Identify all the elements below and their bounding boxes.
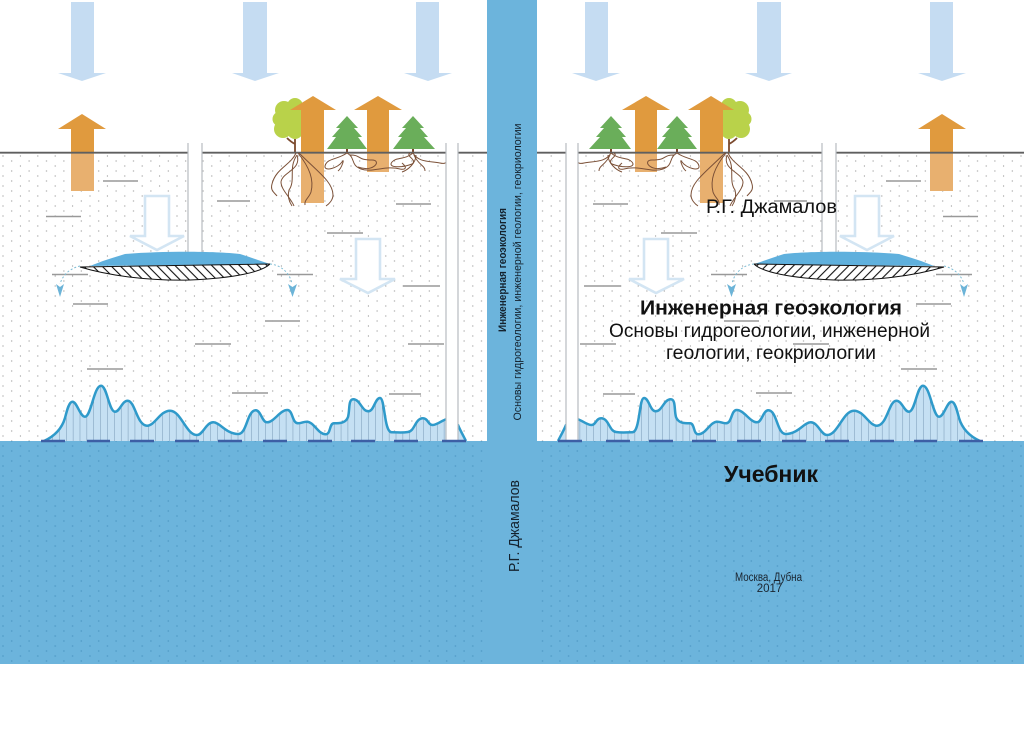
soil layer [0,153,487,441]
ground surface line [0,152,487,154]
drainage segments [41,440,466,442]
author: Р.Г. Джамалов [706,197,837,218]
textbook label: Учебник [724,461,818,487]
panel: back cover scene [0,2,487,664]
clay lenses [46,181,444,394]
subtitle [609,321,930,364]
aquitard hatched lens [80,264,270,280]
well: centre [188,143,202,253]
panel: spine [487,0,537,664]
publisher place and year [735,572,803,595]
icon: spruce trees [327,116,435,153]
spine title: Инженерная геоэкология [497,208,509,332]
evaporation arrow: open ground [58,114,106,191]
tree roots [272,153,446,206]
transpiration arrow: spruce [354,96,402,172]
panel: front cover scene [537,2,1024,664]
transpiration arrow: tree [290,96,336,203]
publisher place and year: 2017 [757,583,782,595]
well: edge [446,143,458,441]
open infiltration arrow: lower [340,239,395,293]
publisher place and year: Москва, Дубна [735,572,803,584]
dotted seepage arrows [56,264,297,297]
perched water lens [90,252,270,266]
spine author: Р.Г. Джамалов [506,480,523,572]
title: Инженерная геоэкология [640,296,902,320]
open infiltration arrow: upper [130,196,184,250]
precipitation arrows [58,2,452,81]
icon: deciduous tree [272,98,309,153]
subtitle: Основы гидрогеологии, инженерной [609,321,930,342]
recharge hydrograph [44,386,466,441]
water layer [0,441,487,664]
spine subtitle: Основы гидрогеологии, инженерной геологии, геокриологии [512,124,524,420]
subtitle: геологии, геокриологии [666,343,876,364]
